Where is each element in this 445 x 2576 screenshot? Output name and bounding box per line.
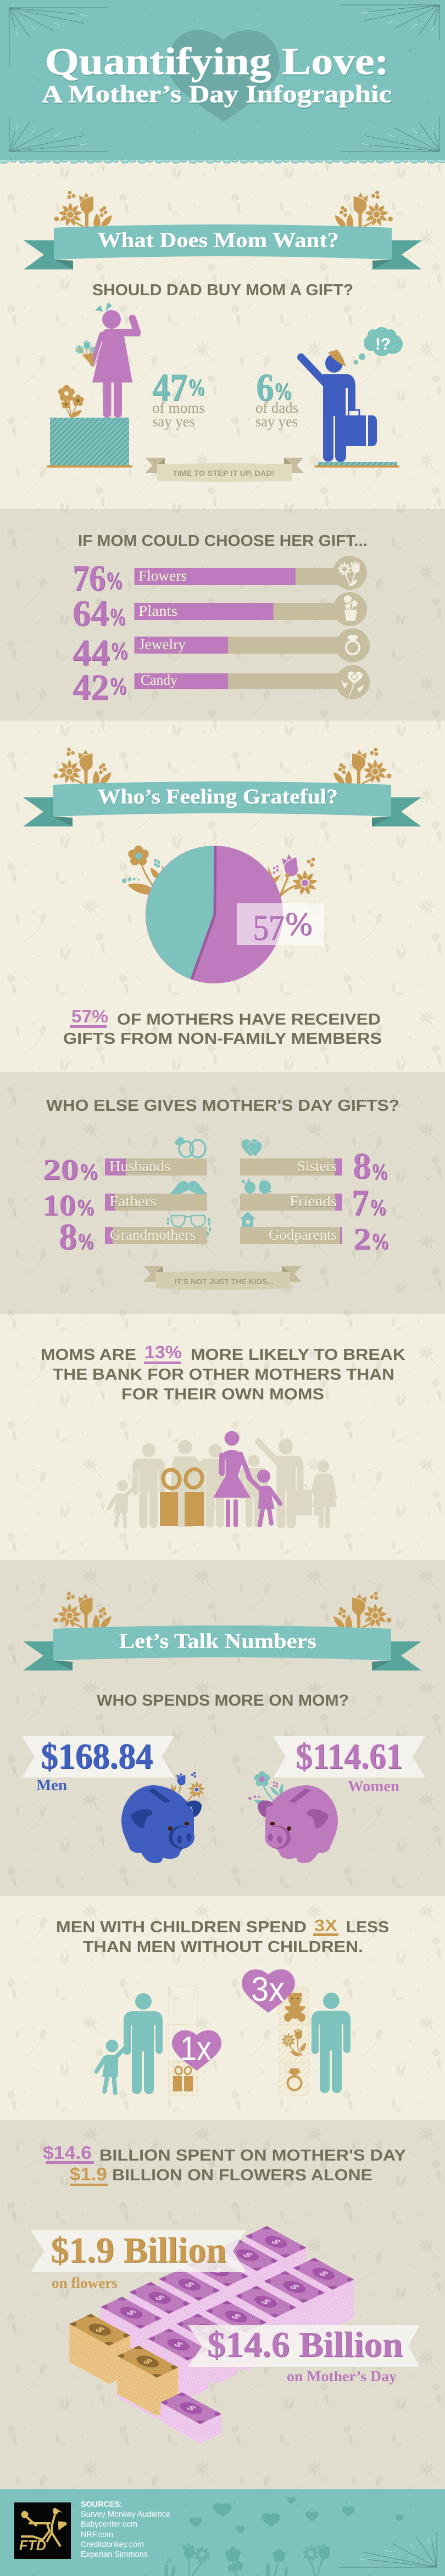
bar: friends 7%: % [369,1195,387,1220]
decorative flowers left [53,747,111,784]
heart 3x [242,1969,295,2013]
text: men with children spend 3x less: THAN MEN WITHOUT CHILDREN. [83,1938,363,1956]
bar: flowers 76%: % [105,566,123,594]
bar: plants 64%: % [109,603,126,631]
icon: friends [241,1178,272,1194]
sources [81,2500,170,2559]
stat: moms 47% [152,365,205,430]
pie chart 57% [146,846,283,983]
stat: dads 6%: % [274,378,292,404]
family illustration [109,1431,338,1528]
bar: candy 42% [73,665,370,708]
flowers [169,1772,205,1804]
panel: who's feeling grateful [0,721,445,1072]
decorative flowers left [54,191,112,227]
heart 1x: 1x [180,2030,212,2068]
bar: grandmothers 8% [59,1216,210,1257]
panel: billions spent [0,2120,445,2489]
hat [328,350,346,367]
section ribbon [24,224,422,269]
icon: teddy bear [284,1993,306,2022]
panel: men with children [0,1896,445,2120]
footer flowers [164,2543,330,2576]
pig details [131,1788,202,1849]
money stacks: $ [152,2294,168,2302]
bar: jewelry 44%: Jewelry [139,636,186,653]
57% label: % [285,905,312,942]
section ribbon: Who’s Feeling Grateful? [98,785,338,808]
heart behind title [168,30,280,122]
icon: hearts [242,1139,262,1156]
footer hearts [189,2497,403,2533]
bar: fathers 10% [42,1181,208,1222]
57% label: 57 [253,908,284,948]
heading: WHO SPENDS MORE ON MOM? [97,1692,349,1709]
text: billion spent: $1.9 [70,2164,107,2184]
right dashed column with three gifts [279,1987,309,2096]
decorative flowers left [53,1591,111,1628]
corner rays [9,5,440,151]
text: moms 13%: MORE LIKELY TO BREAK [191,1346,405,1364]
stat: dads 6%: of dads [255,400,298,416]
money stacks: $ [199,2326,215,2334]
stat: dads 6% [255,365,298,430]
platform [315,462,399,468]
money stacks: $ [286,2283,302,2291]
decorative flowers right [335,191,393,227]
callout ribbon: time to step it up [145,458,304,482]
title: A Mother’s Day Infographic [42,81,392,108]
sources: NRF.com [81,2530,113,2539]
hair bow [95,302,112,312]
women banner: Women [348,1778,399,1795]
text: moms 13%: THE BANK FOR OTHER MOTHERS THAN [53,1366,394,1383]
bar: fathers 10%: % [76,1195,95,1220]
text: moms 13%: 13% [144,1342,182,1362]
sources: Survey Monkey Audience [81,2510,170,2519]
sources: Experian Simmons [81,2550,148,2559]
text: 57% of mothers: GIFTS FROM NON-FAMILY MEMBERS [63,1030,382,1048]
bar: fathers 10%: Fathers [109,1193,157,1210]
section ribbon [23,1626,421,1671]
money stacks: $ [228,2313,244,2321]
heading: WHO ELSE GIVES MOTHER'S DAY GIFTS? [46,1097,399,1115]
bar: sisters 8%: Sisters [297,1158,337,1174]
decorative flowers right [333,747,391,784]
icon: house [240,1212,255,1227]
text: moms 13% [41,1342,405,1403]
bar: godparents 2%: Godparents [269,1227,337,1243]
bar: candy 42%: Candy [141,672,177,688]
money stacks: $ [183,2404,199,2412]
pig body [265,1785,338,1863]
money stacks: $ [170,2341,186,2349]
section ribbon: What Does Mom Want? [98,229,339,252]
mom silhouette [92,310,141,418]
text: billion spent: BILLION SPENT ON MOTHER'S DAY [99,2147,406,2164]
man and child [97,1993,163,2094]
text: billion spent: BILLION ON FLOWERS ALONE [112,2167,372,2184]
text: men with children spend 3x less: LESS [346,1919,389,1936]
bar: godparents 2%: % [371,1229,390,1255]
57% label [237,903,324,948]
icon: wedding rings [175,1137,205,1157]
flowers [248,1771,283,1806]
text: moms 13%: MOMS ARE [41,1346,136,1364]
text: moms 13%: FOR THEIR OWN MOMS [121,1386,324,1403]
gift box [160,1467,204,1526]
bar: friends 7% [240,1178,387,1223]
heart 3x: 3x [251,1971,285,2009]
decorative flowers right [333,1591,391,1628]
heading: IF MOM COULD CHOOSE HER GIFT... [78,532,368,550]
text: billion spent: $14.6 [43,2142,92,2163]
bar: sisters 8%: % [371,1160,388,1185]
bar: flowers 76% [73,556,367,599]
panel: break the bank [0,1314,445,1560]
men banner: $168.84 [41,1736,153,1776]
bouquet [75,340,96,368]
bar: flowers 76%: 76 [73,557,105,599]
icon: potted plant [344,595,358,621]
stat: dads 6%: say yes [255,413,298,430]
mom figure on pedestal [47,302,141,468]
panel: footer [0,2489,445,2576]
gold flowers [58,385,84,418]
bar: fathers 10%: 10 [42,1189,76,1222]
heart 1x [172,2030,221,2071]
FTD logo: FTD [19,2537,46,2553]
icon: flower [281,2028,306,2056]
banner: $14.6 billion: $14.6 Billion [207,2325,403,2365]
sources: Babycenter.com [81,2519,137,2529]
panel: header [0,0,445,164]
section ribbon [23,781,421,826]
sources: SOURCES: [81,2500,123,2509]
money stacks: $ [181,2281,197,2289]
money stacks: $ [92,2326,108,2334]
background people [109,1439,338,1528]
icon: glasses [168,1216,210,1235]
money stacks: $ [140,2358,155,2366]
piggy bank: pink [248,1771,338,1863]
bar: flowers 76%: Flowers [138,567,187,584]
banner: $1.9 billion [31,2230,246,2291]
text: 57% of mothers [63,1006,382,1048]
text: 57% of mothers: 57% [71,1006,108,1026]
header scalloped edge [0,160,445,164]
thought bubble: !? [375,335,391,353]
stat: dads 6%: 6 [256,365,274,409]
money stacks: $ [240,2251,255,2259]
bar: sisters 8% [240,1139,388,1186]
bar: husbands 20%: 20 [43,1153,79,1186]
panel: what does mom want [0,165,445,509]
icon: gift [173,2066,193,2091]
stat: moms 47%: say yes [152,413,195,430]
panel: if mom could choose her gift [0,509,445,721]
money stacks: $ [123,2309,139,2317]
section ribbon: Let’s Talk Numbers [119,1630,316,1653]
man without children [312,1993,351,2093]
bar: candy 42%: % [109,672,127,700]
bar: jewelry 44%: % [110,637,129,665]
bar: jewelry 44% [73,628,370,673]
stat: moms 47%: 47 [152,365,187,409]
text: billion spent [43,2142,406,2186]
bar: plants 64%: 64 [73,592,109,634]
money stacks: $ [258,2298,274,2306]
text: 57% of mothers: OF MOTHERS HAVE RECEIVED [117,1011,381,1028]
bar: grandmothers 8%: % [77,1229,94,1255]
money stacks: $ [315,2270,331,2278]
callout ribbon: time to step it up: TIME TO STEP IT UP, DAD! [173,469,275,477]
dad silhouette with suitcase [301,354,377,462]
money stacks: $ [268,2238,283,2246]
men banner: Men [36,1777,67,1794]
bar: friends 7%: Friends [290,1193,337,1210]
women banner [273,1736,425,1795]
panel: let's talk numbers [0,1560,445,1896]
pedestal [47,418,132,468]
pig details [258,1788,329,1849]
money stacks: $ [210,2266,226,2275]
icon: flowers [337,560,359,586]
thought bubble [354,327,403,364]
flowers behind pie [122,846,318,900]
left dashed column with one gift [168,1987,198,2095]
stat: moms 47%: % [187,374,205,401]
footer corner rays [338,2532,437,2567]
bar: sisters 8%: 8 [353,1145,371,1186]
bar: husbands 20%: % [79,1160,99,1185]
bar: jewelry 44%: 44 [73,632,110,673]
banner: $1.9 billion: $1.9 Billion [51,2230,226,2270]
women banner: $114.61 [296,1736,403,1776]
icon: mustache [169,1181,208,1194]
money stacks [60,2221,364,2443]
panel: who else gives gifts [0,1072,445,1314]
bar: godparents 2%: 2 [353,1222,371,1256]
icon: ring [288,2068,301,2090]
title: Quantifying Love: [45,41,389,83]
bar: husbands 20% [43,1137,207,1186]
men banner [22,1736,175,1794]
pig body [121,1785,194,1863]
title [42,41,392,108]
banner: $1.9 billion: on flowers [52,2275,118,2291]
dad figure [301,327,403,468]
bar: plants 64% [73,592,367,634]
piggy bank: blue [121,1772,205,1863]
bar: husbands 20%: Husbands [109,1158,170,1174]
text: men with children spend 3x less: MEN WITH CHILDREN SPEND [56,1919,307,1936]
bar: grandmothers 8%: Grandmothers [110,1227,196,1243]
bar: friends 7%: 7 [352,1182,369,1223]
sources: Creditdonkey.com [81,2540,144,2549]
stat: moms 47%: of moms [152,400,205,416]
text: men with children spend 3x less: 3X [314,1916,337,1935]
bar: godparents 2% [240,1212,390,1256]
banner: $14.6 billion: on Mother’s Day [287,2368,397,2384]
callout ribbon: not just the kids [143,1266,302,1290]
callout ribbon: not just the kids: IT'S NOT JUST THE KIDS... [175,1277,274,1286]
bar: grandmothers 8%: 8 [59,1216,77,1257]
Mercury figure [21,2508,66,2546]
icon: lollipop [341,672,364,696]
mom and child in pink [213,1431,280,1527]
bar: plants 64%: Plants [138,603,177,619]
banner: $14.6 billion [188,2325,420,2384]
icon: ring [346,635,359,654]
bar: candy 42%: 42 [73,666,109,708]
text: men with children spend 3x less [56,1916,389,1956]
FTD logo [14,2502,71,2559]
heading: SHOULD DAD BUY MOM A GIFT? [92,282,353,299]
